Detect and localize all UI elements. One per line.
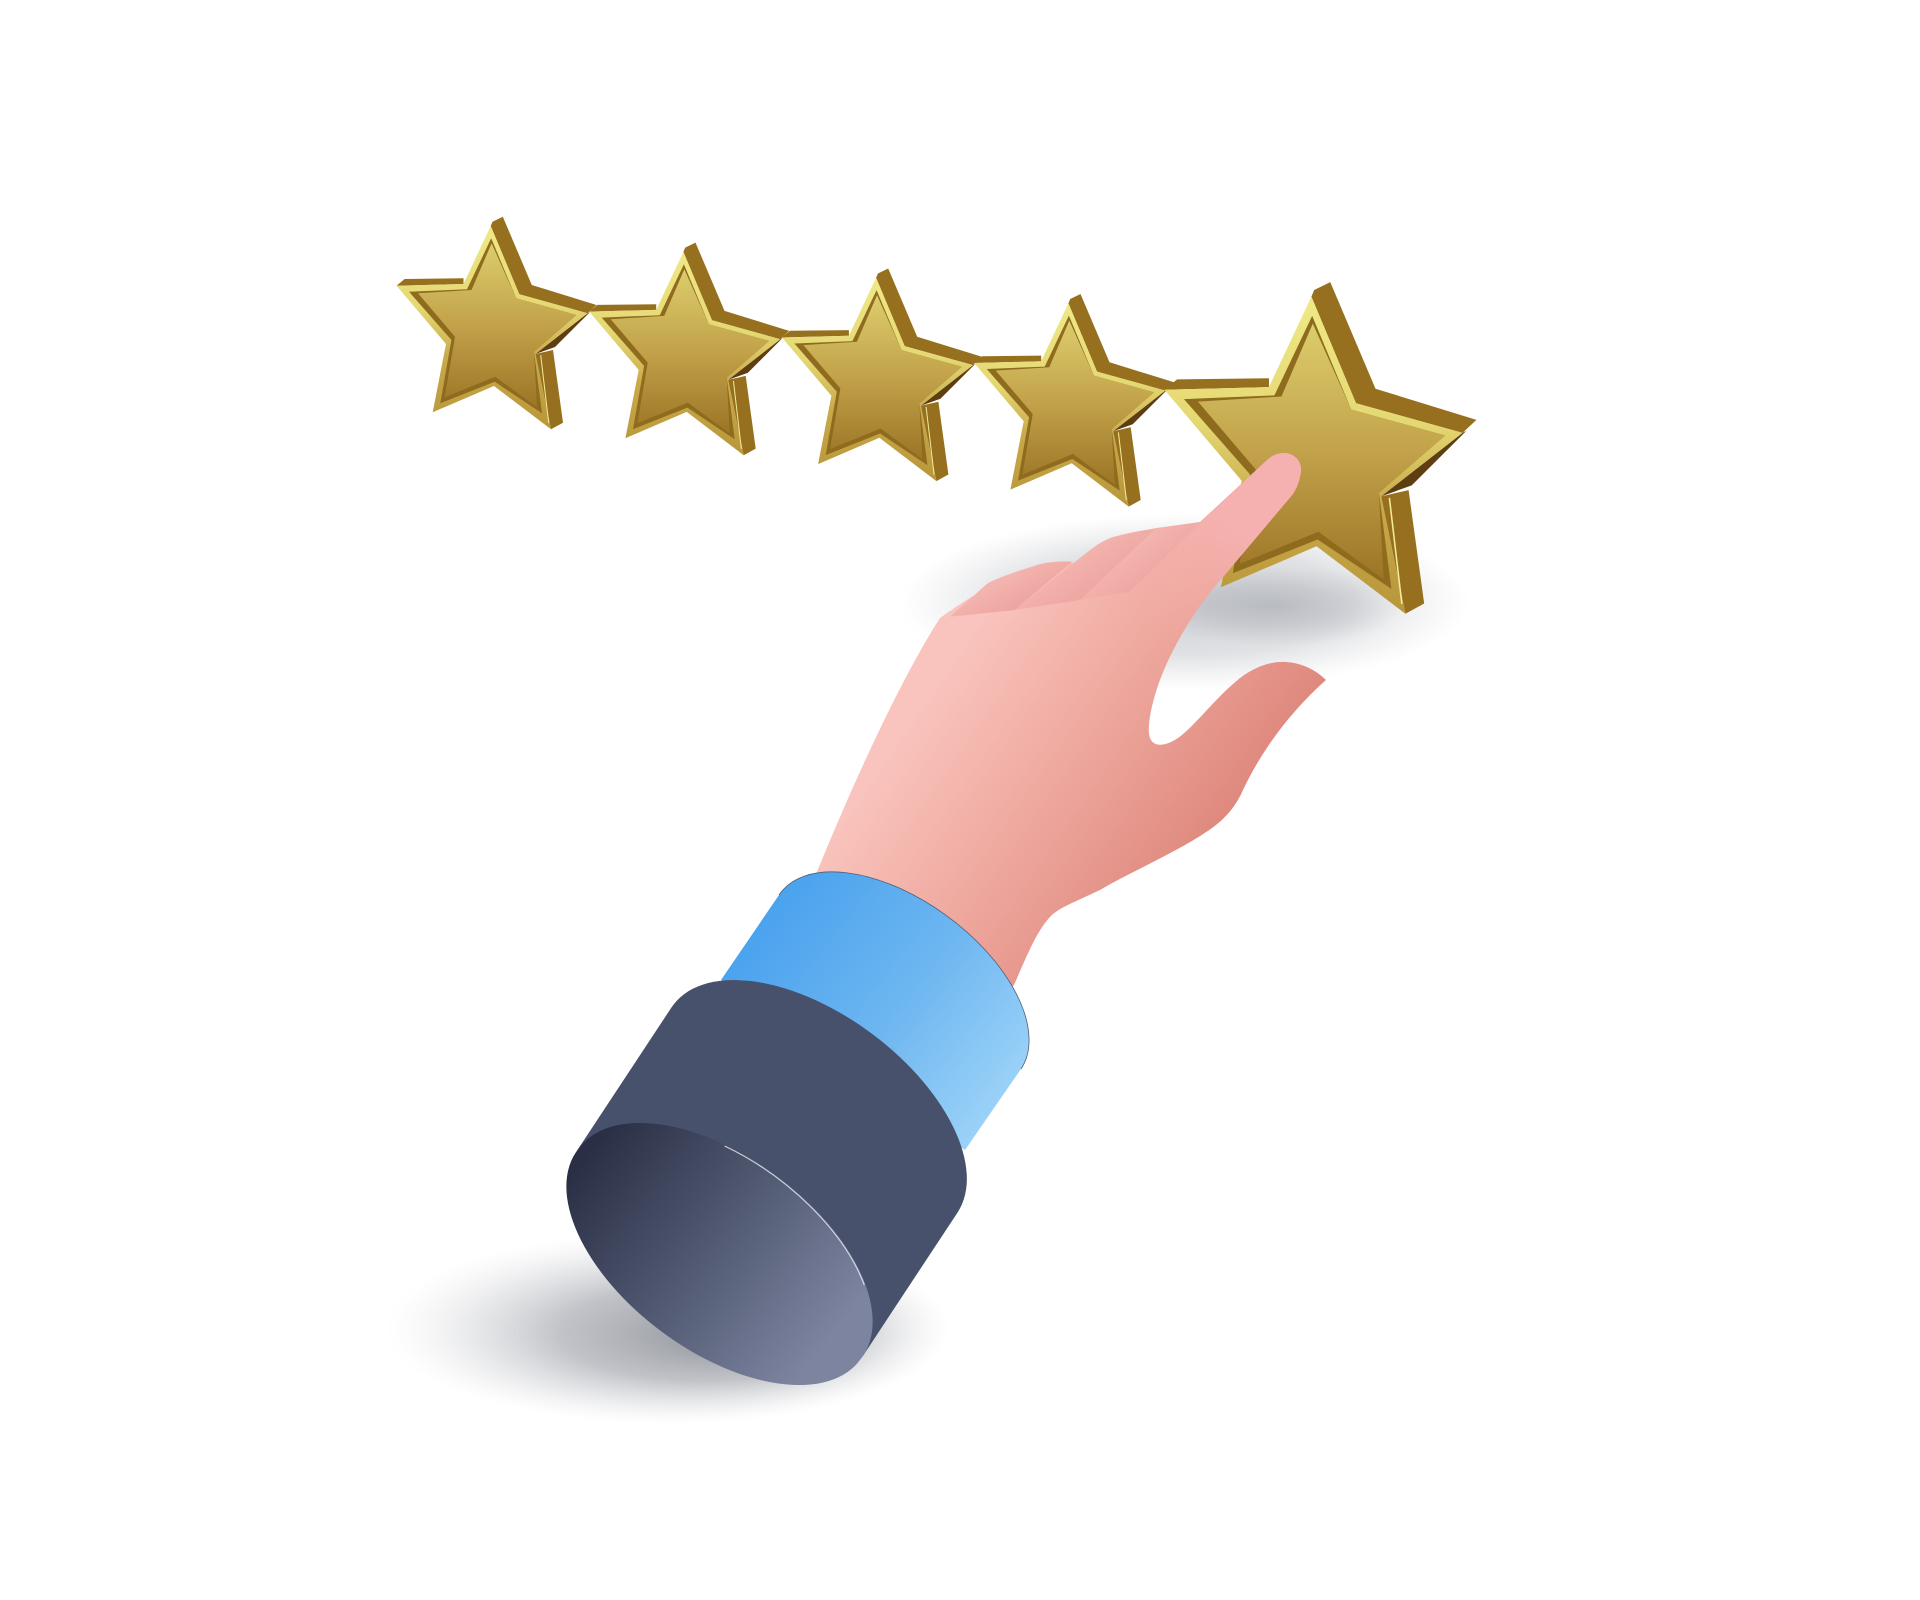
jacket cuff xyxy=(576,980,967,1357)
index finger xyxy=(980,453,1301,680)
star 2 xyxy=(589,243,789,455)
folded finger: ring xyxy=(1015,528,1156,610)
star 4 xyxy=(974,294,1174,507)
hand silhouette xyxy=(817,453,1326,1000)
cuff ground shadow xyxy=(386,1232,950,1424)
star 1 xyxy=(396,217,596,429)
hand xyxy=(817,453,1326,1000)
rating stars row xyxy=(396,217,1476,614)
star and hand ground shadow xyxy=(900,514,1470,690)
folded finger: middle xyxy=(1080,522,1202,600)
cuff opening face xyxy=(566,1123,873,1385)
star 5 large selected xyxy=(1164,282,1476,614)
star 3 xyxy=(782,268,982,481)
cuff rim highlight xyxy=(725,1146,864,1285)
shirt sleeve xyxy=(721,872,1029,1150)
folded finger: little xyxy=(950,561,1072,617)
